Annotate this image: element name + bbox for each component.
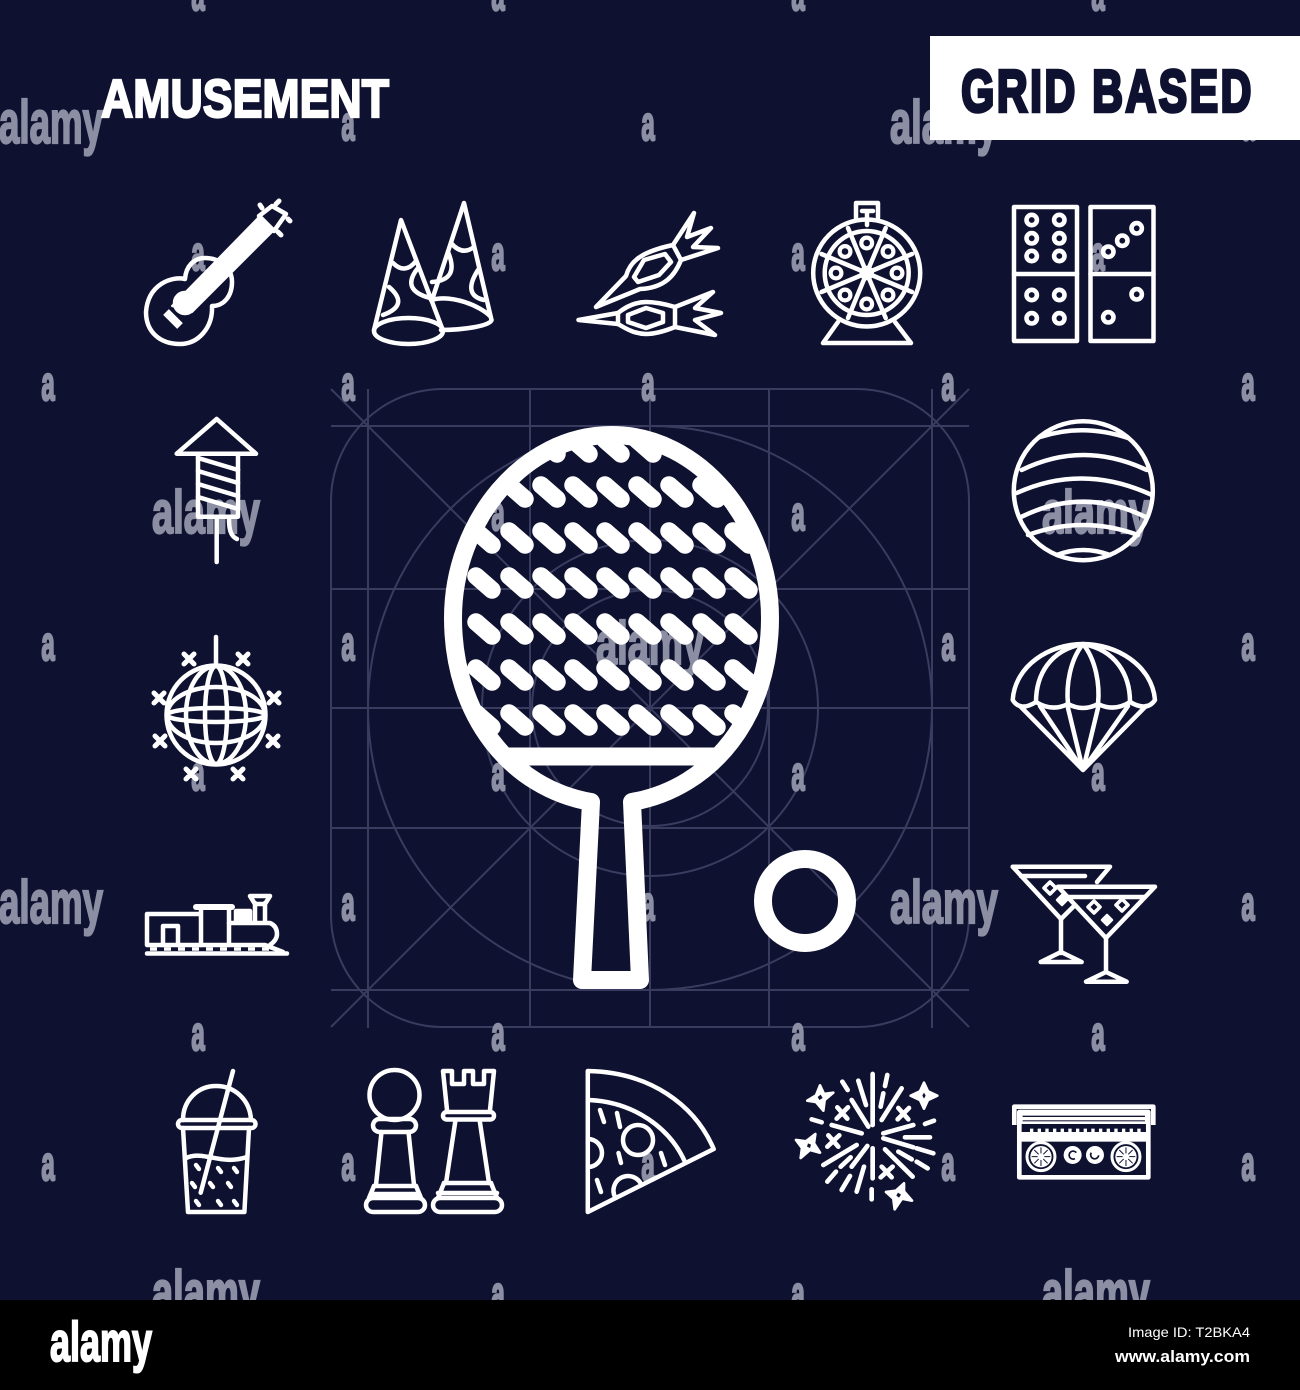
watermarks: small a: a: [1241, 618, 1255, 671]
watermarks: alamy wordmarks: alamy: [1042, 1259, 1150, 1326]
icon: central table tennis paddle: [453, 435, 770, 980]
icon: guitar: [146, 201, 290, 344]
watermarks: small a: a: [641, 98, 655, 151]
badge: grid based: GRID BASED: [961, 58, 1251, 124]
watermarks: small a: a: [491, 748, 505, 801]
watermarks: alamy wordmarks: alamy: [0, 89, 103, 156]
icon: chess rook: [433, 1071, 502, 1212]
watermarks: small a: a: [1241, 358, 1255, 411]
watermarks: small a: a: [341, 358, 355, 411]
icon: toy train: [147, 896, 287, 954]
watermarks: small a: a: [791, 488, 805, 541]
icon: parachute: [1013, 644, 1155, 770]
icon: pizza slice: [588, 1071, 714, 1212]
watermarks: alamy wordmarks: alamy: [0, 869, 103, 936]
watermarks: small a: a: [41, 358, 55, 411]
footer bar: [0, 1300, 1300, 1390]
watermarks: small a: a: [341, 618, 355, 671]
footer url: www.alamy.com: [1114, 1347, 1250, 1366]
watermarks: alamy wordmarks: alamy: [596, 610, 704, 677]
watermarks: alamy wordmarks: alamy: [1042, 479, 1150, 546]
icon: striped planet ball: [1014, 421, 1153, 560]
watermarks: small a: a: [791, 1008, 805, 1061]
icon: prize wheel: [813, 203, 920, 343]
watermarks: small a: a: [341, 1138, 355, 1191]
watermarks: small a: a: [641, 878, 655, 931]
icon: dominoes: [1014, 207, 1154, 341]
watermarks: small a: a: [941, 358, 955, 411]
watermarks: alamy wordmarks: alamy: [152, 479, 260, 546]
footer image id: Image ID: T2BKA4: [1128, 1324, 1250, 1340]
watermarks: small a: a: [791, 748, 805, 801]
watermarks: small a: a: [791, 228, 805, 281]
icon: fireworks: [796, 1074, 937, 1209]
watermarks: small a: a: [491, 228, 505, 281]
watermarks: small a: a: [41, 618, 55, 671]
watermarks: small a: a: [941, 1138, 955, 1191]
watermarks: small a: a: [491, 1008, 505, 1061]
watermarks: small a: a: [641, 358, 655, 411]
watermarks: alamy wordmarks: alamy: [152, 1259, 260, 1326]
icon: party hats: [374, 203, 492, 344]
footer logo: alamy: [50, 1310, 152, 1373]
watermarks: alamy wordmarks: alamy: [890, 89, 998, 156]
watermarks: small a: a: [191, 1008, 205, 1061]
watermarks: small a: a: [941, 618, 955, 671]
icon: darts: [578, 213, 721, 335]
icon: drink cup with straw: [178, 1071, 256, 1212]
icon: firework rocket: [177, 419, 256, 562]
watermarks: small a: a: [1241, 98, 1255, 151]
watermarks: small a: a: [641, 1138, 655, 1191]
watermarks: small a: a: [1091, 748, 1105, 801]
watermarks: small a: a: [41, 1138, 55, 1191]
watermarks: small a: a: [1241, 878, 1255, 931]
icon: disco ball: [154, 637, 279, 779]
watermarks: alamy wordmarks: [0, 89, 1150, 1326]
watermarks: small a: a: [341, 98, 355, 151]
watermarks: small a: a: [341, 878, 355, 931]
icon: chess pawn: [366, 1070, 425, 1212]
title: AMUSEMENT: [101, 69, 389, 129]
watermarks: small a: a: [1241, 1138, 1255, 1191]
icon: martini glasses: [1013, 867, 1155, 982]
watermarks: small a: a: [191, 748, 205, 801]
watermarks: alamy wordmarks: alamy: [890, 869, 998, 936]
watermarks: small a: a: [1091, 1008, 1105, 1061]
icon: table tennis ball: [763, 859, 847, 943]
watermarks: small a: a: [1091, 228, 1105, 281]
icon: boombox radio: [1014, 1107, 1153, 1177]
watermarks: small a: a: [791, 1268, 805, 1321]
badge: grid based: [930, 36, 1300, 140]
watermarks: small a: a: [191, 228, 205, 281]
watermarks: small a: a: [491, 1268, 505, 1321]
watermarks: small a: a: [491, 488, 505, 541]
